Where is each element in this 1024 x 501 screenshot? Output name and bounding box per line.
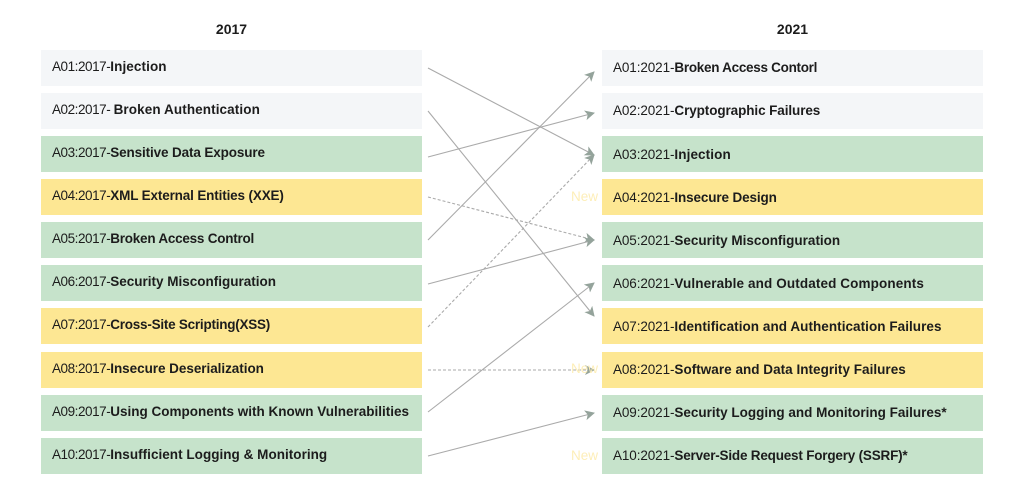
row: A02 2021 bbox=[602, 93, 983, 129]
arrow: A05 to A01 bbox=[428, 72, 594, 240]
row: A07 2017: A07:2017-Cross-Site Scripting(XSS) bbox=[52, 317, 270, 332]
arrow: A09 to A06 bbox=[428, 283, 594, 412]
label: New A10: New bbox=[571, 448, 598, 463]
row: A02 2017 bbox=[41, 93, 422, 129]
row: A02 2017: A02:2017- Broken Authentication bbox=[52, 102, 260, 117]
arrow: A01 to A03 bbox=[428, 68, 594, 155]
row: A09 2017: A09:2017-Using Components with Known Vulnerabilities bbox=[52, 404, 409, 419]
row: A09 2021 bbox=[602, 395, 983, 431]
row: A01 2021 bbox=[602, 50, 983, 86]
row: A04 2021: A04:2021-Insecure Design bbox=[613, 190, 777, 205]
row: A06 2021 bbox=[602, 265, 983, 301]
row: A01 2017 bbox=[41, 50, 422, 86]
row: A06 2021: A06:2021-Vulnerable and Outdated Components bbox=[613, 276, 924, 291]
row: A03 2021 bbox=[602, 136, 983, 172]
row: A05 2021: A05:2021-Security Misconfiguration bbox=[613, 233, 840, 248]
arrow: A03 to A02 bbox=[428, 113, 594, 157]
arrow: A08 to A08 dashed bbox=[428, 369, 594, 371]
row: A07 2021: A07:2021-Identification and Authentication Failures bbox=[613, 319, 942, 334]
heading: 2021: 2021 bbox=[777, 21, 808, 37]
row: A07 2021 bbox=[602, 308, 983, 344]
arrow: A06 to A05 bbox=[428, 240, 594, 284]
row: A09 2021: A09:2021-Security Logging and Monitoring Failures* bbox=[613, 405, 947, 420]
row: A04 2021 bbox=[602, 179, 983, 215]
arrow: A10 to A09 bbox=[428, 413, 594, 456]
row: A08 2017 bbox=[41, 352, 422, 388]
row: A08 2017: A08:2017-Insecure Deserialization bbox=[52, 361, 264, 376]
label: New A04: New bbox=[571, 189, 598, 204]
arrow: A04 to A05 dashed bbox=[428, 197, 594, 240]
row: A06 2017: A06:2017-Security Misconfiguration bbox=[52, 274, 276, 289]
row: A10 2017: A10:2017-Insufficient Logging & Monitoring bbox=[52, 447, 327, 462]
row: A07 2017 bbox=[41, 308, 422, 344]
heading: 2017: 2017 bbox=[216, 21, 247, 37]
row: A08 2021 bbox=[602, 352, 983, 388]
row: A01 2021: A01:2021-Broken Access Contorl bbox=[613, 60, 817, 75]
row: A05 2017: A05:2017-Broken Access Control bbox=[52, 231, 254, 246]
row: A05 2017 bbox=[41, 222, 422, 258]
row: A04 2017 bbox=[41, 179, 422, 215]
panel: 2017 list bbox=[41, 50, 422, 474]
row: A03 2017 bbox=[41, 136, 422, 172]
panel: 2021 list bbox=[602, 50, 983, 474]
row: A06 2017 bbox=[41, 265, 422, 301]
row: A10 2017 bbox=[41, 438, 422, 474]
row: A09 2017 bbox=[41, 395, 422, 431]
row: A03 2021: A03:2021-Injection bbox=[613, 147, 731, 162]
row: A08 2021: A08:2021-Software and Data Integrity Failures bbox=[613, 362, 906, 377]
row: A04 2017: A04:2017-XML External Entities (XXE) bbox=[52, 188, 284, 203]
row: A10 2021: A10:2021-Server-Side Request Forgery (SSRF)* bbox=[613, 448, 907, 463]
arrow: A02 to A07 bbox=[428, 111, 594, 316]
label: New A08: New bbox=[571, 361, 598, 376]
row: A03 2017: A03:2017-Sensitive Data Exposure bbox=[52, 145, 265, 160]
row: A02 2021: A02:2021-Cryptographic Failures bbox=[613, 103, 820, 118]
row: A10 2021 bbox=[602, 438, 983, 474]
arrow: A07 to A03 dashed bbox=[428, 155, 594, 327]
row: A05 2021 bbox=[602, 222, 983, 258]
row: A01 2017: A01:2017-Injection bbox=[52, 59, 167, 74]
